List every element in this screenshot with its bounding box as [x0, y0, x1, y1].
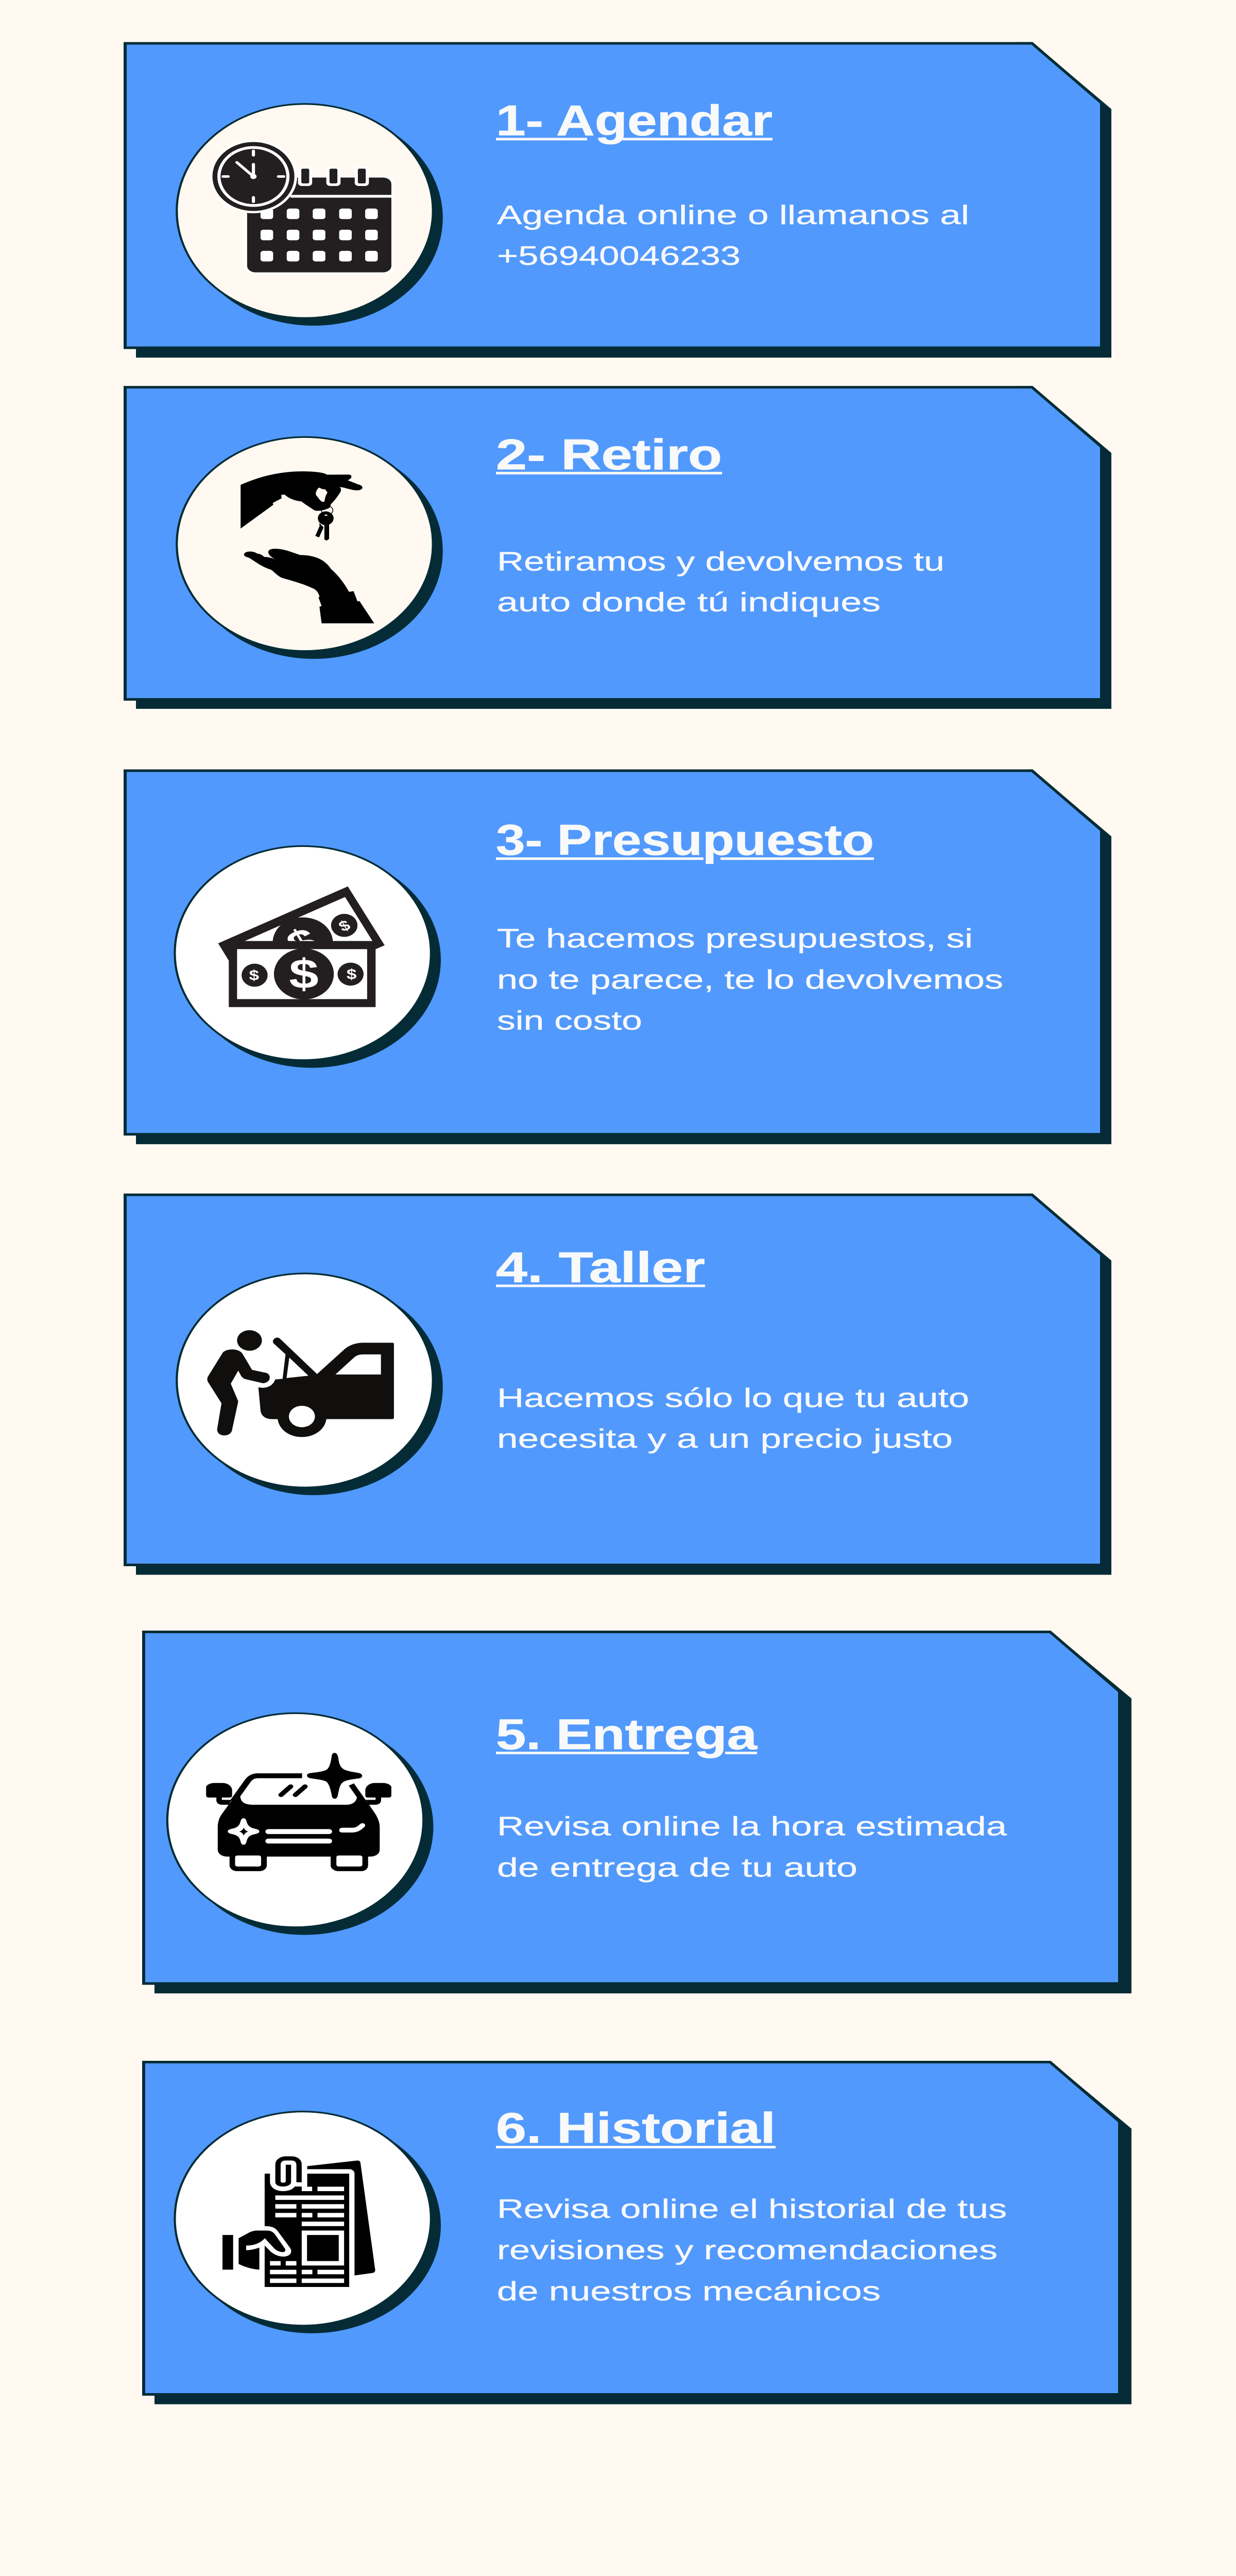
text: step 4 description [497, 1383, 969, 1454]
text: step 4 description: Hacemos sólo lo que tu auto [497, 1383, 969, 1413]
text: step 1 description [497, 200, 969, 271]
heading: 1- Agendar: 1- Agendar [496, 96, 772, 145]
panel: step 5 Entrega [144, 1631, 1131, 1993]
icon: dollar bills: $ [289, 951, 319, 997]
text: step 4 description: necesita y a un precio justo [497, 1424, 953, 1454]
text: step 3 description [497, 924, 1003, 1036]
icon: mechanic at open car hood [176, 1273, 443, 1495]
text: step 2 description [497, 547, 945, 617]
heading: 6. Historial: 6. Historial [496, 2104, 776, 2152]
panel: step 2 Retiro [125, 386, 1111, 709]
text: step 1 description: Agenda online o llamanos al [497, 200, 969, 230]
text: step 6 description: Revisa online el historial de tus [497, 2194, 1007, 2224]
panel: step 6 Historial [144, 2061, 1131, 2404]
text: step 3 description: no te parece, te lo devolvemos [497, 965, 1003, 995]
text: step 5 description [497, 1811, 1007, 1883]
text: step 6 description: revisiones y recomendaciones [497, 2235, 998, 2265]
icon: dollar bills: $ [347, 966, 357, 982]
text: step 5 description: Revisa online la hora estimada [497, 1811, 1007, 1841]
text: step 2 description: Retiramos y devolvemos tu [497, 547, 945, 577]
text: step 3 description: Te hacemos presupuestos, si [497, 924, 973, 954]
heading: 2- Retiro: 2- Retiro [496, 431, 722, 479]
icon: dollar bills: $ [279, 920, 327, 968]
text: step 6 description [497, 2194, 1007, 2307]
panel: step 1 Agendar [125, 42, 1111, 358]
text: step 6 description: de nuestros mecánicos [497, 2277, 881, 2307]
panel: step 4 Taller [125, 1194, 1111, 1575]
icon: calendar and clock [176, 103, 443, 326]
panel: step 3 Presupuesto [125, 769, 1111, 1144]
heading: 4. Taller: 4. Taller [496, 1243, 705, 1291]
text: step 2 description: auto donde tú indiques [497, 587, 881, 617]
text: step 5 description: de entrega de tu auto [497, 1853, 857, 1883]
heading: 3- Presupuesto: 3- Presupuesto [496, 816, 874, 864]
icon: clean shiny car [166, 1713, 434, 1935]
icon: hands passing car keys [176, 436, 443, 659]
text: step 3 description: sin costo [497, 1006, 642, 1036]
icon: dollar bills: $ [249, 967, 260, 983]
icon: dollar bills [174, 845, 441, 1068]
icon: document with paperclip and hand [174, 2110, 441, 2333]
infographic canvas [124, 42, 1131, 2404]
text: step 1 description: +56940046233 [497, 241, 741, 271]
icon: dollar bills: $ [335, 917, 353, 935]
heading: 5. Entrega: 5. Entrega [496, 1710, 758, 1758]
